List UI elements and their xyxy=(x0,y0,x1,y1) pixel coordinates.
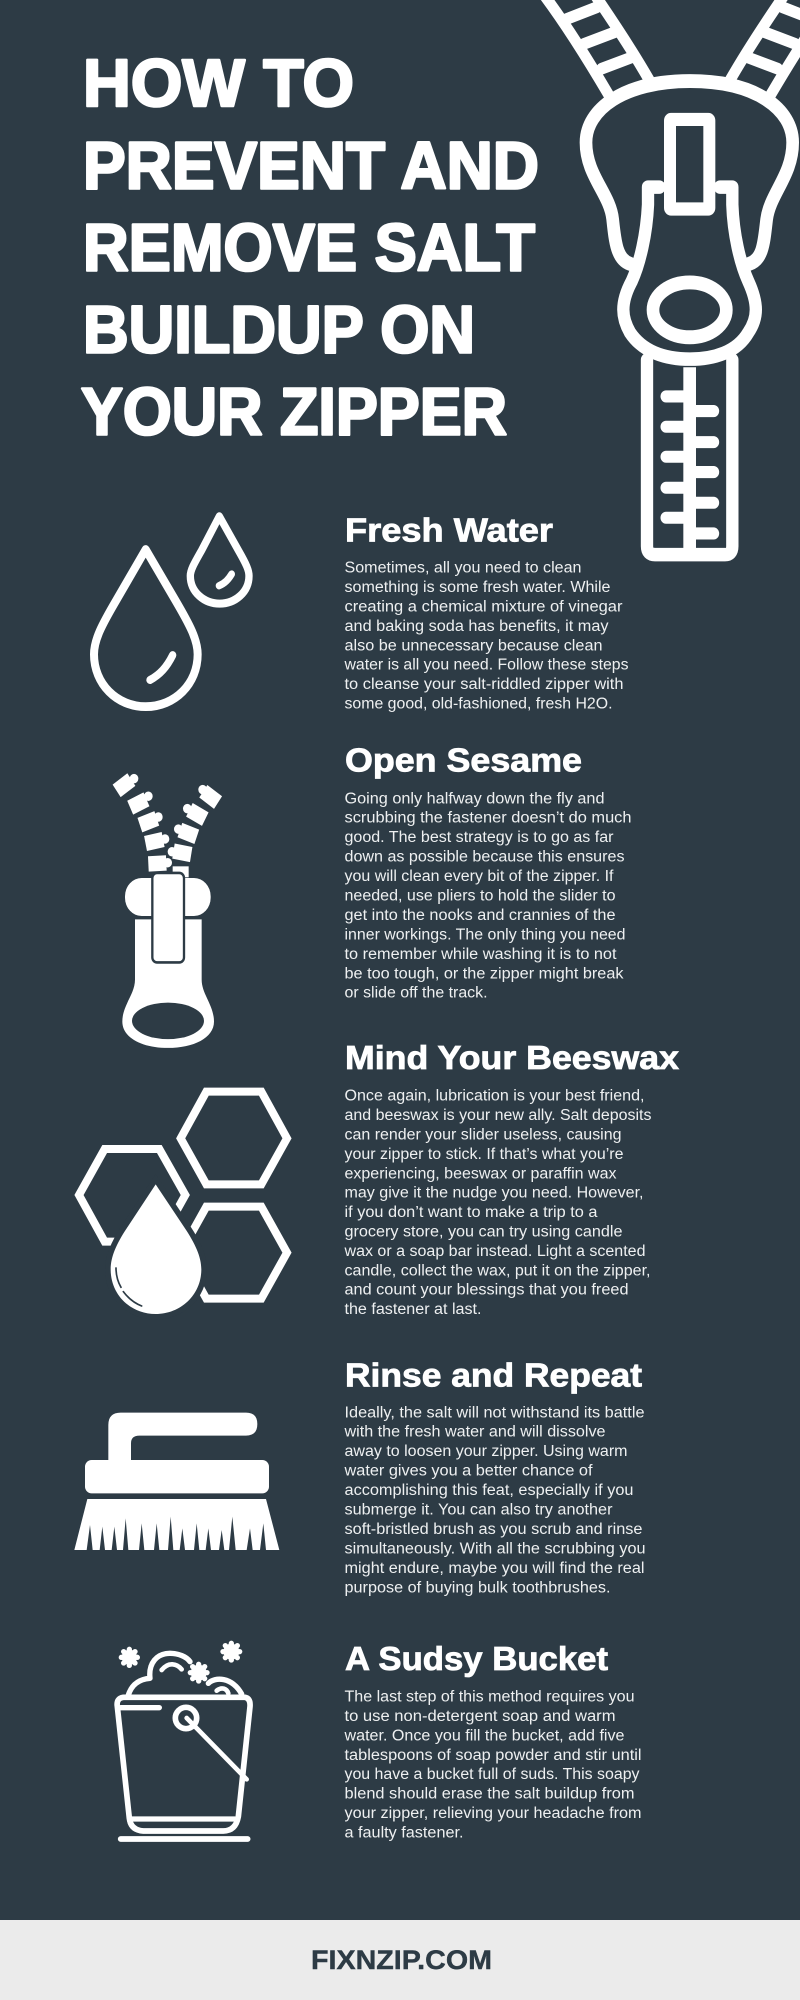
footer: FIXNZIP.COM xyxy=(311,1945,492,1975)
text block: rinse and repeat: simultaneously. With all the scrubbing you xyxy=(344,1540,646,1557)
icon: water drops xyxy=(94,516,249,707)
text block: open sesame: or slide off the track. xyxy=(344,985,488,1002)
icon: beeswax honeycomb with drop xyxy=(79,1092,287,1314)
text block: mind your beeswax: Once again, lubrication is your best friend, xyxy=(344,1088,644,1105)
text block: mind your beeswax: experiencing, beeswax or paraffin wax xyxy=(344,1165,617,1182)
text block: a sudsy bucket: your zipper, relieving your headache from xyxy=(344,1805,642,1822)
panel: open sesame text xyxy=(344,742,632,1002)
text block: mind your beeswax: your zipper to stick. If that’s what you’re xyxy=(344,1146,624,1163)
icon: small zipper xyxy=(113,773,222,1048)
text block: open sesame: needed, use pliers to hold the slider to xyxy=(344,888,616,904)
title: REMOVE SALT xyxy=(83,210,535,286)
text block: rinse and repeat xyxy=(343,1404,646,1596)
text block: mind your beeswax: and beeswax is your new ally. Salt deposits xyxy=(344,1107,652,1124)
text block: a sudsy bucket: The last step of this method requires you xyxy=(344,1689,634,1706)
text block: fresh water xyxy=(343,560,629,712)
panel: fresh water text xyxy=(343,512,629,712)
text block: a sudsy bucket xyxy=(343,1689,642,1841)
text block: rinse and repeat: accomplishing this feat, especially if you xyxy=(344,1482,634,1499)
text block: a sudsy bucket: a faulty fastener. xyxy=(344,1824,464,1841)
text block: open sesame: down as possible because this ensures xyxy=(344,849,625,866)
text block: fresh water: and baking soda has benefits, it may xyxy=(344,618,609,635)
text block: mind your beeswax: and count your blessings that you freed xyxy=(344,1282,628,1299)
text block: rinse and repeat: soft-bristled brush as you scrub and rinse xyxy=(344,1521,642,1538)
heading: fresh water: Fresh Water xyxy=(345,512,553,548)
panel: mind your beeswax text xyxy=(343,1039,680,1318)
text block: fresh water: to cleanse your salt-riddled zipper with xyxy=(344,676,624,693)
heading: mind your beeswax: Mind Your Beeswax xyxy=(345,1039,680,1076)
text block: fresh water: Sometimes, all you need to clean xyxy=(344,560,582,577)
heading: rinse and repeat: Rinse and Repeat xyxy=(345,1357,642,1394)
text block: rinse and repeat: away to loosen your zipper. Using warm xyxy=(344,1443,628,1460)
text block: a sudsy bucket: tablespoons of soap powder and stir until xyxy=(344,1747,642,1764)
title xyxy=(81,46,539,450)
text block: mind your beeswax: if you don’t want to make a trip to a xyxy=(344,1204,598,1221)
text block: a sudsy bucket: you have a bucket full of suds. This soapy xyxy=(344,1766,640,1783)
text block: a sudsy bucket: blend should erase the salt buildup from xyxy=(344,1786,634,1803)
text block: a sudsy bucket: water. Once you fill the bucket, add five xyxy=(343,1728,624,1744)
text block: fresh water: something is some fresh water. While xyxy=(344,579,610,596)
text block: fresh water: some good, old-fashioned, fresh H2O. xyxy=(344,696,612,712)
icon: large zipper xyxy=(545,0,800,555)
text block: open sesame: to remember while washing it is to not xyxy=(344,946,617,963)
text block: rinse and repeat: with the fresh water and will dissolve xyxy=(343,1424,606,1441)
heading: open sesame: Open Sesame xyxy=(345,742,582,778)
panel: rinse and repeat text xyxy=(343,1357,646,1596)
panel: a sudsy bucket text xyxy=(343,1640,642,1841)
text block: mind your beeswax: grocery store, you can try using candle xyxy=(344,1224,622,1240)
text block: mind your beeswax xyxy=(343,1088,652,1318)
text block: open sesame: you will clean every bit of the zipper. If xyxy=(344,868,614,885)
text block: mind your beeswax: may give it the nudge you need. However, xyxy=(344,1185,644,1202)
text block: mind your beeswax: the fastener at last. xyxy=(344,1301,482,1318)
title: HOW TO xyxy=(83,46,354,121)
title: YOUR ZIPPER xyxy=(81,374,507,450)
icon: scrub brush xyxy=(74,1413,279,1550)
text block: rinse and repeat: Ideally, the salt will not withstand its battle xyxy=(344,1404,644,1421)
text block: open sesame: Going only halfway down the fly and xyxy=(344,790,604,807)
text block: mind your beeswax: can render your slider useless, causing xyxy=(344,1126,622,1144)
text block: mind your beeswax: wax or a soap bar instead. Light a scented xyxy=(343,1243,646,1260)
text block: mind your beeswax: candle, collect the wax, put it on the zipper, xyxy=(344,1262,650,1279)
text block: fresh water: creating a chemical mixture of vinegar xyxy=(344,598,622,616)
text block: fresh water: also be unnecessary because clean xyxy=(344,637,602,654)
text block: rinse and repeat: might endure, maybe you will find the real xyxy=(344,1560,644,1577)
icon: sudsy bucket xyxy=(117,1641,250,1839)
text block: open sesame xyxy=(344,790,632,1002)
text block: fresh water: water is all you need. Follow these steps xyxy=(343,657,629,674)
text block: a sudsy bucket: to use non-detergent soap and warm xyxy=(344,1708,616,1725)
title: BUILDUP ON xyxy=(83,292,475,368)
text block: open sesame: scrubbing the fastener doesn’t do much xyxy=(344,810,632,827)
text block: open sesame: inner workings. The only thing you need xyxy=(344,926,626,943)
title: PREVENT AND xyxy=(83,128,539,204)
text block: rinse and repeat: purpose of buying bulk toothbrushes. xyxy=(344,1579,610,1596)
footer xyxy=(0,1920,800,2000)
text block: rinse and repeat: water gives you a better chance of xyxy=(343,1463,593,1480)
text block: rinse and repeat: submerge it. You can also try another xyxy=(344,1502,612,1518)
text block: open sesame: be too tough, or the zipper might break xyxy=(344,965,624,982)
text block: open sesame: good. The best strategy is to go as far xyxy=(344,829,614,846)
text block: open sesame: get into the nooks and crannies of the xyxy=(344,907,616,924)
heading: a sudsy bucket: A Sudsy Bucket xyxy=(345,1640,608,1677)
